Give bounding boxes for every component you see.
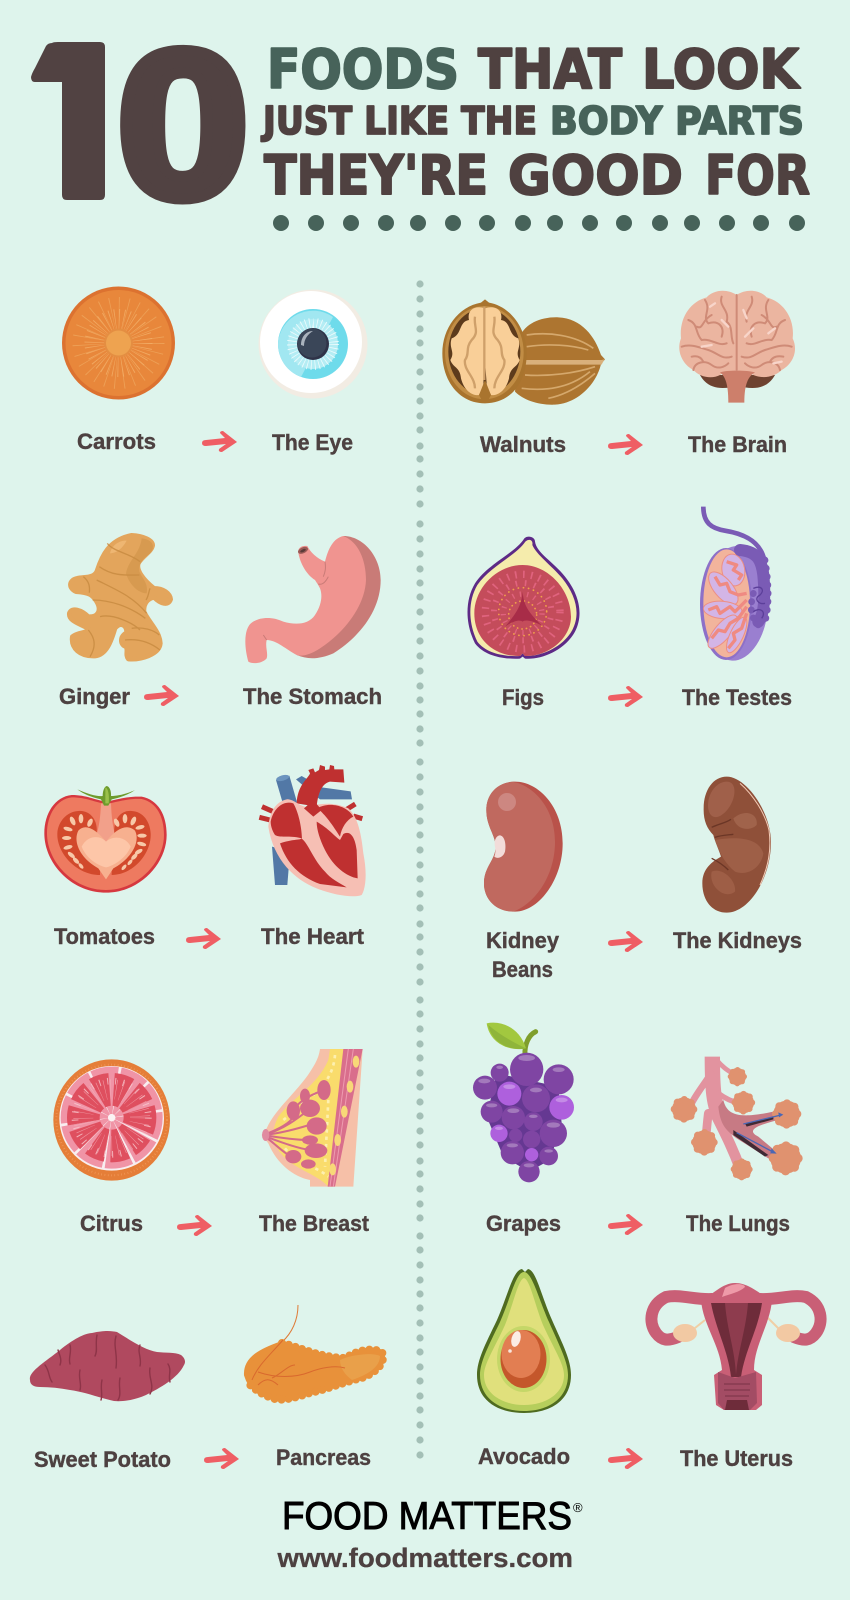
icon: walnut [442,299,605,405]
label: Grapes: Grapes [486,1211,561,1236]
footer url: www.foodmatters.com [276,1543,573,1573]
title line 3: THEY'RE [264,144,488,207]
icon: grapes [473,1023,574,1182]
label: Figs: Figs [502,685,544,710]
label: The Uterus: The Uterus [680,1446,793,1471]
label: Pancreas: Pancreas [276,1445,371,1470]
icon: fig [467,537,580,659]
icon: heart [259,765,366,896]
icon: sweet potato [30,1331,185,1401]
title line 1 [267,38,801,101]
label: The Lungs: The Lungs [686,1211,790,1236]
label: Avocado: Avocado [478,1444,570,1469]
centre dotted divider [416,280,424,1459]
icon: stomach [245,536,381,663]
label: The Testes: The Testes [682,685,792,710]
title line 2: JUST LIKE THE [260,99,537,144]
title line 3: FOR [705,144,810,207]
label: Carrots: Carrots [77,429,156,454]
icon: tomato [44,786,167,893]
arrow [186,928,221,949]
arrow [608,686,643,707]
title line 2: BODY PARTS [550,99,804,144]
label: The Eye: The Eye [272,430,353,455]
arrow [608,1448,643,1469]
arrow [608,931,643,952]
icon: citrus slice [53,1059,170,1181]
icon: testis [699,507,771,662]
arrow [608,1214,643,1235]
label: Kidney Beans [486,928,560,982]
arrow [202,431,237,452]
icon: brain [679,291,795,403]
arrow [608,434,643,455]
title line 1: LOOK [642,38,801,101]
label: Ginger: Ginger [59,684,130,709]
title line 2 [260,99,804,144]
label: Kidney Beans: Beans [492,957,553,982]
icon: avocado [477,1269,571,1413]
label: Tomatoes: Tomatoes [54,924,155,949]
title number: 10 [31,42,246,204]
label: Walnuts: Walnuts [480,432,566,457]
icon: eye [258,290,368,398]
arrow [144,685,179,706]
footer logo: FOOD MATTERS [282,1495,572,1538]
icon: kidney [702,777,771,913]
title line 1: THAT [478,38,622,101]
label: The Breast: The Breast [259,1211,370,1236]
label: Citrus: Citrus [80,1211,143,1236]
label: Sweet Potato: Sweet Potato [34,1447,171,1472]
icon: carrot slice [62,286,175,400]
footer logo: ® [573,1500,583,1515]
arrow [204,1448,239,1469]
icon: uterus [651,1283,821,1410]
label: The Stomach: The Stomach [243,684,382,709]
title line 3 [264,144,810,207]
icon: kidney bean [484,782,563,912]
label: The Brain: The Brain [688,432,787,457]
label: The Heart: The Heart [261,924,365,949]
label: The Kidneys: The Kidneys [673,928,802,953]
label: Kidney Beans: Kidney [486,928,560,953]
icon: breast anatomy [262,1049,363,1187]
icon: lungs bronchi [672,1057,801,1179]
icon: ginger [69,535,171,659]
title number: 10: 1 [20,4,137,239]
title line 1: FOODS [267,38,459,101]
title number: 10: 0 [117,8,249,242]
icon: pancreas [246,1305,383,1400]
arrow [177,1215,212,1236]
title dotted rule [273,215,805,231]
title line 3: GOOD [508,144,683,207]
